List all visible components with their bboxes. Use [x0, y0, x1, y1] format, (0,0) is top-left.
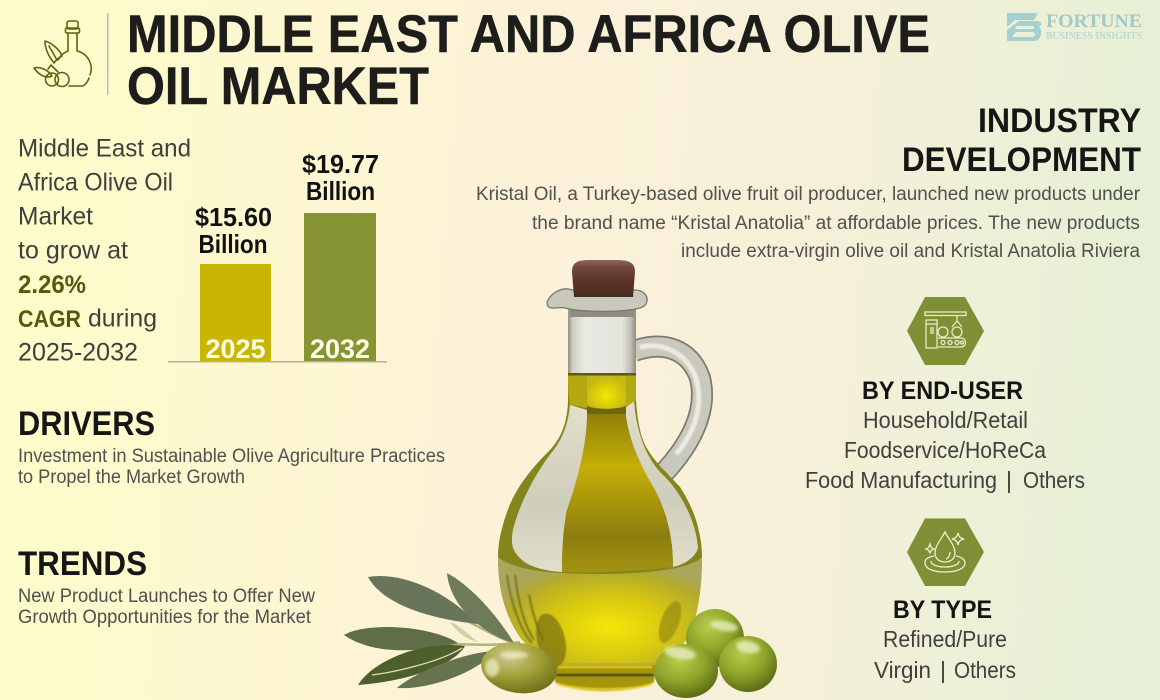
panel: industry development: the brand name “Kristal Anatolia” at affordable prices. The new products: [532, 213, 1140, 234]
olive: [654, 644, 718, 698]
bottle body: [498, 374, 702, 664]
oil in neck: [568, 373, 636, 414]
panel: drivers: Investment in Sustainable Olive Agriculture Practices: [18, 446, 445, 467]
panel: by type: Virgin: [874, 657, 931, 683]
leaf: [368, 576, 478, 624]
bottle handle: [634, 346, 702, 482]
illustration: olive oil bottle: [498, 260, 702, 691]
panel: by type: |: [940, 657, 946, 683]
leaf: [447, 573, 514, 643]
oil surface lower: [498, 557, 702, 664]
panel: by end-user: Foodservice/HoReCa: [844, 437, 1046, 463]
text block: market growth summary: to grow at: [18, 236, 128, 264]
panel: industry development: include extra-virgin olive oil and Kristal Anatolia Riviera: [681, 241, 1140, 262]
leaf: [397, 651, 495, 688]
glass reflection left: [512, 405, 587, 572]
panel: by end-user: Food Manufacturing: [805, 467, 997, 493]
panel: by type: Others: [954, 657, 1016, 683]
glass reflection right: [625, 400, 698, 567]
panel: industry development: DEVELOPMENT: [902, 141, 1141, 179]
bar: 2025: [195, 202, 272, 364]
title: OIL MARKET: [127, 57, 429, 116]
title: MIDDLE EAST AND AFRICA OLIVE: [127, 5, 930, 64]
text block: market growth summary: Market: [18, 202, 93, 230]
divider: [107, 13, 108, 95]
bottle lip: [547, 289, 647, 311]
bar chart: market size 2025 vs 2032: [168, 149, 387, 364]
bar: 2025: Billion: [198, 229, 268, 259]
illustration: olive branch: [344, 573, 520, 688]
panel: by end-user: Household/Retail: [863, 407, 1028, 433]
panel: trends: [18, 545, 315, 628]
panel: by end-user: |: [1006, 467, 1012, 493]
cork: [572, 260, 635, 297]
panel: drivers: DRIVERS: [18, 405, 155, 443]
bar: 2032: [302, 149, 379, 364]
olive: [478, 638, 560, 698]
panel: by type: [874, 596, 1016, 683]
logo: Fortune Business Insights: BUSINESS INSIGHTS: [1046, 30, 1142, 42]
panel: drivers: to Propel the Market Growth: [18, 467, 245, 488]
bottle foot: [553, 664, 656, 691]
panel: trends: Growth Opportunities for the Market: [18, 607, 312, 628]
panel: by end-user: BY END-USER: [862, 377, 1023, 405]
text block: market growth summary: Middle East and: [18, 134, 191, 162]
panel: trends: New Product Launches to Offer New: [18, 586, 315, 607]
bar: 2032: Billion: [306, 176, 375, 206]
bar: 2025: 2025: [206, 334, 266, 364]
text block: market growth summary: Africa Olive Oil: [18, 168, 173, 196]
olive: [719, 636, 777, 692]
text block: market growth summary: 2025-2032: [18, 338, 138, 366]
illustration: olives: [478, 609, 777, 698]
reflections of olives and leaves in oil: [507, 575, 686, 670]
icon: food production line hexagon: [907, 297, 984, 365]
bar: 2032: $19.77: [302, 149, 379, 179]
icon: oil drop hexagon: [907, 518, 984, 586]
bottle neck glass: [568, 308, 636, 374]
panel: industry development: Kristal Oil, a Turkey-based olive fruit oil producer, launched new products under: [476, 184, 1141, 205]
logo: Fortune Business Insights: FORTUNE: [1046, 11, 1142, 32]
panel: industry development: INDUSTRY: [978, 102, 1141, 140]
panel: drivers: [18, 405, 445, 488]
icon: olive oil bottle with olives: [34, 21, 91, 86]
panel: by end-user: Others: [1023, 467, 1085, 493]
olive: [686, 609, 744, 667]
text block: market growth summary: [18, 134, 191, 366]
oil column centre: [562, 410, 673, 572]
text block: market growth summary: during: [88, 304, 157, 332]
panel: industry development: [476, 102, 1141, 262]
bar: 2032: 2032: [310, 334, 370, 364]
leaf: [358, 645, 465, 685]
logo: Fortune Business Insights: [1007, 11, 1142, 42]
leaf: [344, 627, 458, 650]
panel: by end-user: [805, 377, 1085, 493]
pale leaf: [450, 622, 478, 642]
text block: market growth summary: 2.26%: [18, 271, 86, 299]
panel: by type: BY TYPE: [893, 596, 992, 624]
title: [127, 5, 930, 116]
bar: 2025: $15.60: [195, 202, 272, 232]
panel: by type: Refined/Pure: [883, 626, 1007, 652]
text block: market growth summary: CAGR: [18, 306, 81, 333]
panel: trends: TRENDS: [18, 545, 147, 583]
